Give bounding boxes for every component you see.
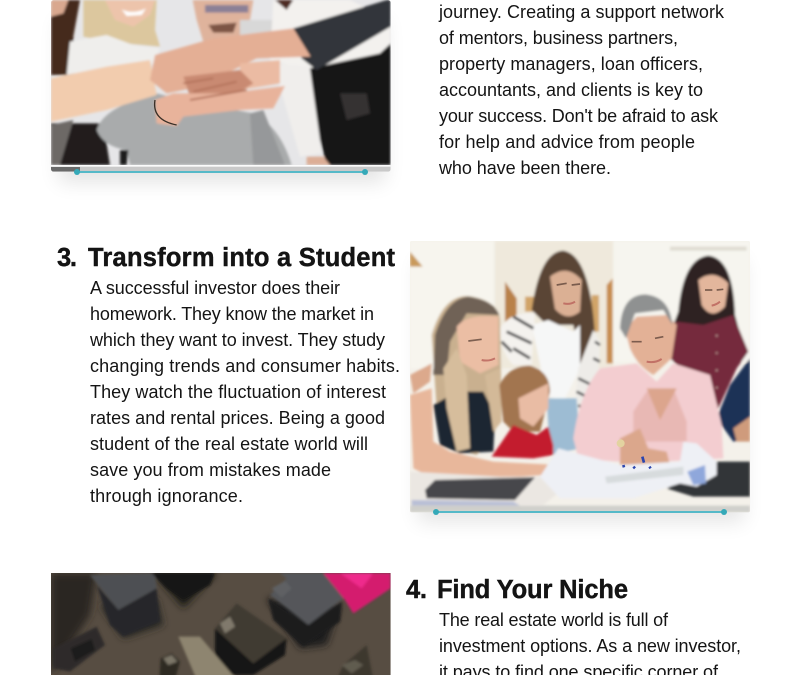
text block: tip 3 body: A successful investor does their [90,278,340,298]
text block: tip 4 body: The real estate world is full of [439,610,669,630]
accent line under tip 2 photo [74,169,368,175]
heading: tip 4: 4. [406,576,427,604]
text block: tip 4 body [439,610,741,675]
text block: tip 3 body: changing trends and consumer habits. [90,356,400,376]
text block: tip 3 body: save you from mistakes made [90,460,331,480]
text block: tip 2 body: accountants, and clients is key to [439,80,703,100]
text block: tip 2 body: property managers, loan officers, [439,54,703,74]
accent line under tip 3 photo [433,509,727,515]
text block: tip 3 body: rates and rental prices. Being a good [90,408,385,428]
text block: tip 2 body [438,2,725,178]
heading: tip 3: Transform into a Student [88,244,396,272]
text block: tip 3 body: They watch the fluctuation of interest [90,382,386,402]
text block: tip 4 body: investment options. As a new investor, [439,636,741,656]
text block: tip 3 body: homework. They know the market in [90,304,374,324]
panel: tip 4 photo of model houses [51,573,391,675]
text block: tip 2 body: your success. Don't be afraid to ask [439,106,719,126]
panel: tip 2 photo of team stacking hands [51,0,391,182]
text block: tip 3 body [89,278,400,506]
text block: tip 2 body: of mentors, business partners, [439,28,678,48]
heading: tip 3: 3. [57,244,77,272]
text block: tip 2 body: for help and advice from people [439,132,695,152]
text block: tip 2 body: who have been there. [438,158,611,178]
panel: tip 3 photo of family reviewing plans [410,241,750,522]
text block: tip 3 body: which they want to invest. They study [89,330,385,350]
heading: tip 4: Find Your Niche [437,576,628,604]
text block: tip 2 body: journey. Creating a support network [438,2,725,22]
text block: tip 3 body: student of the real estate world will [90,434,368,454]
text block: tip 3 body: through ignorance. [90,486,243,506]
